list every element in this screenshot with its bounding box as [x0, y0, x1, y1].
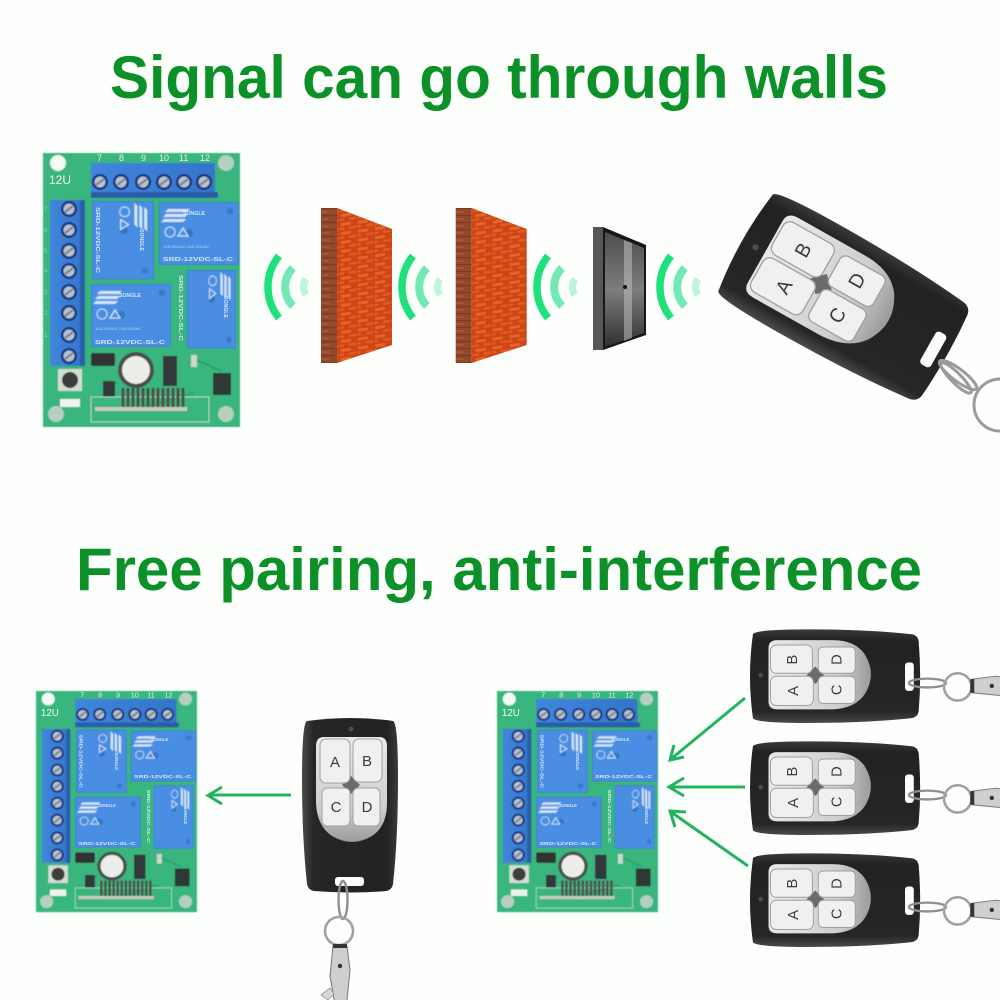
title: signal through walls: Signal can go through walls	[110, 44, 888, 111]
receiver board left: SONGLE	[183, 806, 188, 824]
receiver board left: 11	[147, 690, 155, 699]
remote bottom: A	[786, 910, 802, 920]
panel: multiple remotes pairing	[497, 629, 1000, 947]
receiver board right: SONGLE	[575, 752, 580, 770]
receiver board right: SONGLE	[611, 737, 629, 742]
receiver board right: 10	[592, 690, 600, 699]
arrows: three remotes to board	[669, 698, 748, 866]
receiver board left: 10	[131, 690, 139, 699]
remote top	[750, 629, 1000, 723]
receiver board right: SRD-12VDC-SL-C	[595, 774, 652, 779]
receiver board large: SRD-12VDC-SL-C	[95, 340, 165, 346]
remote upright with keychain: B	[362, 753, 372, 770]
receiver board large: 8	[119, 153, 124, 163]
receiver board large: 4	[44, 269, 48, 275]
receiver board large	[43, 153, 240, 427]
signal waves 4	[660, 256, 698, 318]
remote middle	[750, 741, 1000, 835]
receiver board right: 12U	[502, 708, 520, 719]
panel: signal through walls diagram	[43, 153, 1000, 431]
receiver board large: 10A 250VAC 10A 125VAC	[163, 244, 209, 249]
signal waves 2	[402, 256, 440, 318]
remote bottom: C	[830, 909, 846, 919]
receiver board large: SRD-12VDC-SL-C	[177, 275, 183, 341]
receiver board right: SONGLE	[559, 803, 577, 808]
receiver board left: SRD-12VDC-SL-C	[134, 774, 191, 779]
receiver board large: 6	[44, 228, 48, 234]
receiver board large: 12U	[49, 173, 71, 187]
remote large, rotated: D	[844, 269, 871, 293]
receiver board large: 1	[44, 333, 48, 339]
receiver board left: SONGLE	[114, 752, 119, 770]
receiver board right: SRD-12VDC-SL-C	[539, 841, 597, 846]
receiver board large: SONGLE	[119, 293, 141, 299]
remote large, rotated: A	[772, 275, 798, 298]
receiver board right: 11	[608, 690, 616, 699]
receiver board right: SRD-12VDC-SL-C	[539, 735, 544, 788]
receiver board left: 8	[98, 690, 102, 699]
remote bottom	[750, 853, 1000, 947]
arrow: remote to board	[208, 787, 291, 804]
receiver board large: 12	[200, 153, 210, 163]
receiver board left: 12	[164, 690, 172, 699]
door	[593, 227, 646, 350]
receiver board large: SONGLE	[138, 229, 144, 251]
remote upright with keychain: A	[330, 754, 340, 771]
receiver board left: SONGLE	[150, 737, 168, 742]
receiver board large: SONGLE	[222, 296, 228, 318]
receiver board right: 7	[541, 690, 545, 699]
receiver board right: SRD-12VDC-SL-C	[607, 789, 612, 843]
receiver board large: 9	[141, 153, 146, 163]
remote top: A	[786, 686, 802, 696]
receiver board large: 2	[44, 311, 48, 317]
receiver board left: SONGLE	[98, 803, 116, 808]
receiver board left: SRD-12VDC-SL-C	[78, 735, 83, 788]
brick wall 2	[456, 208, 527, 363]
remote middle: A	[786, 798, 802, 808]
brick wall 1	[321, 208, 392, 363]
receiver board left	[36, 690, 197, 912]
remote top: C	[830, 685, 846, 695]
panel: single remote pairing	[36, 690, 398, 1000]
remote upright with keychain: C	[331, 799, 342, 816]
receiver board left: 7	[80, 690, 84, 699]
receiver board right: SONGLE	[644, 806, 649, 824]
receiver board large: 10A 250VAC 10A 125VAC	[95, 326, 141, 331]
receiver board left: SRD-12VDC-SL-C	[146, 789, 151, 843]
receiver board left: 12U	[41, 708, 59, 719]
receiver board large: SONGLE	[183, 211, 205, 217]
receiver board right: 9	[577, 690, 581, 699]
remote upright with keychain	[302, 718, 398, 1000]
remote large, rotated: C	[825, 304, 851, 327]
receiver board right: 8	[559, 690, 563, 699]
title: free pairing: Free pairing, anti-interference	[76, 536, 922, 603]
receiver board large: 5	[44, 249, 48, 255]
receiver board right: 12	[625, 690, 633, 699]
remote top: B	[785, 655, 801, 665]
remote large, rotated: B	[791, 239, 817, 262]
remote middle: D	[830, 766, 846, 777]
receiver board large: 7	[97, 153, 102, 163]
remote top: D	[830, 654, 846, 665]
remote bottom: D	[830, 878, 846, 889]
receiver board left: SRD-12VDC-SL-C	[78, 841, 136, 846]
receiver board large: 3	[44, 290, 48, 296]
remote bottom: B	[785, 879, 801, 889]
receiver board large: SRD-12VDC-SL-C	[94, 207, 100, 273]
receiver board large: 7	[44, 207, 48, 213]
remote upright with keychain: D	[362, 799, 373, 816]
signal waves 1	[268, 256, 306, 318]
remote middle: B	[785, 767, 801, 777]
key chain large	[936, 356, 1000, 431]
receiver board large: 11	[179, 153, 188, 163]
receiver board large: SRD-12VDC-SL-C	[163, 257, 233, 263]
receiver board left: 9	[116, 690, 120, 699]
receiver board right	[497, 690, 658, 912]
remote middle: C	[830, 797, 846, 807]
signal waves 3	[537, 256, 575, 318]
remote large, rotated	[712, 187, 977, 410]
receiver board large: 10	[159, 153, 169, 163]
